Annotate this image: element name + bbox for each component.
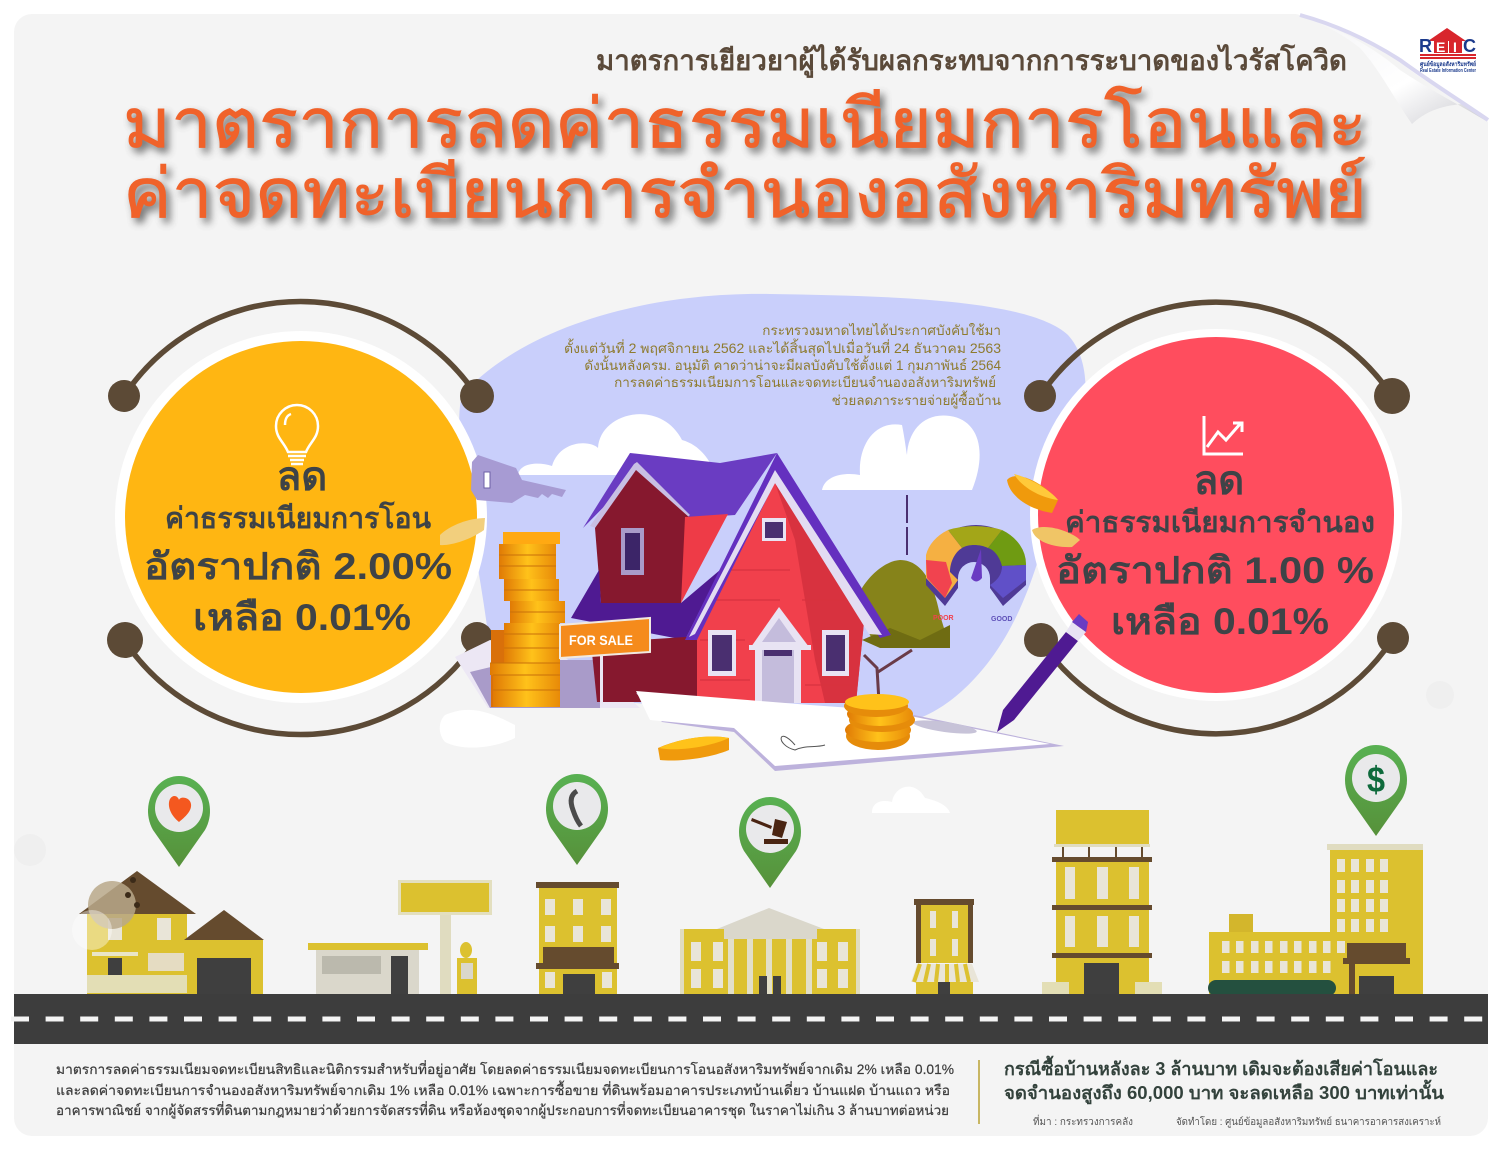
pin: phone <box>546 774 608 865</box>
icon: heart <box>169 796 191 822</box>
gauge <box>926 525 1026 623</box>
for sale sign <box>560 618 650 707</box>
mortgage fee text <box>1056 459 1375 642</box>
logo: REIC: C <box>1463 36 1476 56</box>
bottom right text: กรณีซื้อบ้านหลังละ 3 ล้านบาท เดิมจะต้องเสียค่าโอนและ <box>1004 1055 1438 1079</box>
bottom left text: และลดค่าจดทะเบียนการจำนองอสังหาริมทรัพย์จากเดิม 1% เหลือ 0.01% เฉพาะการซื้อขาย ที่ดินพร้อมอาคารประเภทบ้านเดี่ยว บ้านแฝด บ้านแถว หรือ <box>56 1080 950 1098</box>
dark wall <box>595 470 690 603</box>
gauge: GOOD <box>991 616 1012 623</box>
for sale sign: FOR SALE <box>569 632 633 648</box>
coin stack bottom <box>844 694 915 750</box>
pin: gavel <box>739 797 801 888</box>
left circle arcs <box>124 301 477 735</box>
dashed line <box>906 495 908 557</box>
transfer fee text: ค่าธรรมเนียมการโอน <box>165 500 431 535</box>
window left <box>621 528 644 575</box>
virus watermark <box>14 681 1454 866</box>
mortgage fee text: อัตราปกติ 1.00 % <box>1056 550 1374 591</box>
contract paper <box>636 691 1064 771</box>
left connector dots <box>107 379 494 658</box>
intro text: การลดค่าธรรมเนียมการโอนและจดทะเบียนจำนองอสังหาริมทรัพย์ <box>614 374 996 390</box>
blue blob backdrop <box>459 294 1086 724</box>
building: house <box>72 871 264 995</box>
back roof <box>583 453 777 528</box>
icon: growth chart <box>1204 416 1243 454</box>
title: มาตราการลดค่าธรรมเนียมการโอนและ <box>127 90 1371 167</box>
pin: heart <box>148 776 210 867</box>
house body <box>571 453 891 703</box>
pen <box>997 614 1088 732</box>
logo: REIC: R <box>1419 36 1432 56</box>
red gable wall <box>697 483 864 703</box>
bottom left text: มาตรการลดค่าธรรมเนียมจดทะเบียนสิทธิและนิติกรรมสำหรับที่อยู่อาศัย โดยลดค่าธรรมเนียมจดทะเบียนการโอนอสังหาริมทรัพย์จากเดิม 2% เหลือ 0.01% <box>56 1060 954 1078</box>
icon: key <box>471 455 566 503</box>
clouds <box>440 414 980 813</box>
window front right <box>822 630 849 676</box>
title: ค่าจดทะเบียนการจำนองอสังหาริมทรัพย์ <box>123 156 1367 232</box>
transfer fee text: อัตราปกติ 2.00% <box>144 546 452 587</box>
right connector dots <box>1024 378 1410 657</box>
transfer fee text: ลด <box>277 455 327 499</box>
transfer fee text: เหลือ 0.01% <box>193 597 411 638</box>
window front left <box>708 630 736 676</box>
lower dark wall <box>591 636 701 702</box>
pin: dollar <box>1345 745 1407 836</box>
building: office <box>536 882 619 995</box>
panel: transfer fee circle <box>115 331 487 703</box>
road <box>11 994 1488 1044</box>
page curl corner with logo <box>1296 14 1488 124</box>
door <box>755 645 801 703</box>
building: gas station <box>308 880 492 995</box>
tree <box>862 560 950 702</box>
ground paper left <box>455 640 640 708</box>
building: shop <box>911 899 979 995</box>
icon: light bulb <box>276 405 318 464</box>
mortgage fee text: เหลือ 0.01% <box>1111 601 1329 642</box>
icon: gavel <box>751 818 788 844</box>
building: tower <box>1042 810 1162 995</box>
logo: REIC: ศูนย์ข้อมูลอสังหาริมทรัพย์ <box>1420 60 1476 69</box>
icon: phone <box>571 791 581 826</box>
mortgage fee text: ลด <box>1194 459 1244 503</box>
main roof <box>685 453 891 640</box>
icon: dollar: $ <box>1367 759 1385 800</box>
bottom left text <box>56 1060 954 1119</box>
logo: REIC: Real Estate Information Center <box>1420 68 1476 74</box>
title <box>123 85 1371 237</box>
intro text: ช่วยลดภาระรายจ่ายผู้ซื้อบ้าน <box>832 390 1001 409</box>
lower roof <box>571 570 720 640</box>
virus overlay <box>72 877 140 950</box>
title: มาตราการลดค่าธรรมเนียมการโอนและ <box>123 85 1367 162</box>
siding lines <box>700 570 855 685</box>
logo: REIC: E <box>1436 39 1445 55</box>
building: bank <box>680 908 860 995</box>
building: complex <box>1208 844 1423 996</box>
mortgage fee text: ค่าธรรมเนียมการจำนอง <box>1065 507 1375 539</box>
intro text <box>564 322 1001 409</box>
panel: mortgage fee circle <box>1030 329 1402 701</box>
transfer fee text <box>144 455 452 638</box>
source credits: ที่มา : กระทรวงการคลัง <box>1033 1114 1133 1128</box>
title: ค่าจดทะเบียนการจำนองอสังหาริมทรัพย์ <box>127 161 1371 237</box>
bottom left text: อาคารพาณิชย์ จากผู้จัดสรรที่ดินตามกฎหมายว่าด้วยการจัดสรรที่ดิน หรือห้องชุดจากผู้ประกอบการที่จดทะเบียนอาคารชุด ในราคาไม่เกิน 3 ล้านบาทต่อหน่วย <box>56 1101 949 1119</box>
source credits: จัดทำโดย : ศูนย์ข้อมูลอสังหาริมทรัพย์ ธนาคารอาคารสงเคราะห์ <box>1176 1115 1441 1128</box>
intro text: ตั้งแต่วันที่ 2 พฤศจิกายน 2562 และได้สิ้นสุดไปเมื่อวันที่ 24 ธันวาคม 2563 <box>564 338 1001 357</box>
logo: REIC <box>1419 28 1476 74</box>
coin stack left <box>490 532 565 707</box>
house illustration group <box>440 453 1088 771</box>
intro text: กระทรวงมหาดไทยได้ประกาศบังคับใช้มา <box>762 322 1001 338</box>
gauge: POOR <box>933 615 954 622</box>
logo: REIC: I <box>1453 39 1457 55</box>
window top <box>762 518 786 541</box>
subtitle: มาตรการเยียวยาผู้ได้รับผลกระทบจากการระบาดของไวรัสโควิด <box>596 43 1347 78</box>
right circle arcs <box>1040 302 1392 734</box>
fuel pump <box>457 942 477 995</box>
bottom right text: จดจำนองสูงถึง 60,000 บาท จะลดเหลือ 300 บาทเท่านั้น <box>1004 1079 1445 1105</box>
source credits <box>1033 1114 1441 1128</box>
bottom right text <box>1004 1055 1445 1105</box>
floating coins <box>440 474 1080 547</box>
flat coin <box>658 736 729 761</box>
intro text: ดังนั้นหลังครม. อนุมัติ คาดว่าน่าจะมีผลบังคับใช้ตั้งแต่ 1 กุมภาพันธ์ 2564 <box>584 355 1001 374</box>
